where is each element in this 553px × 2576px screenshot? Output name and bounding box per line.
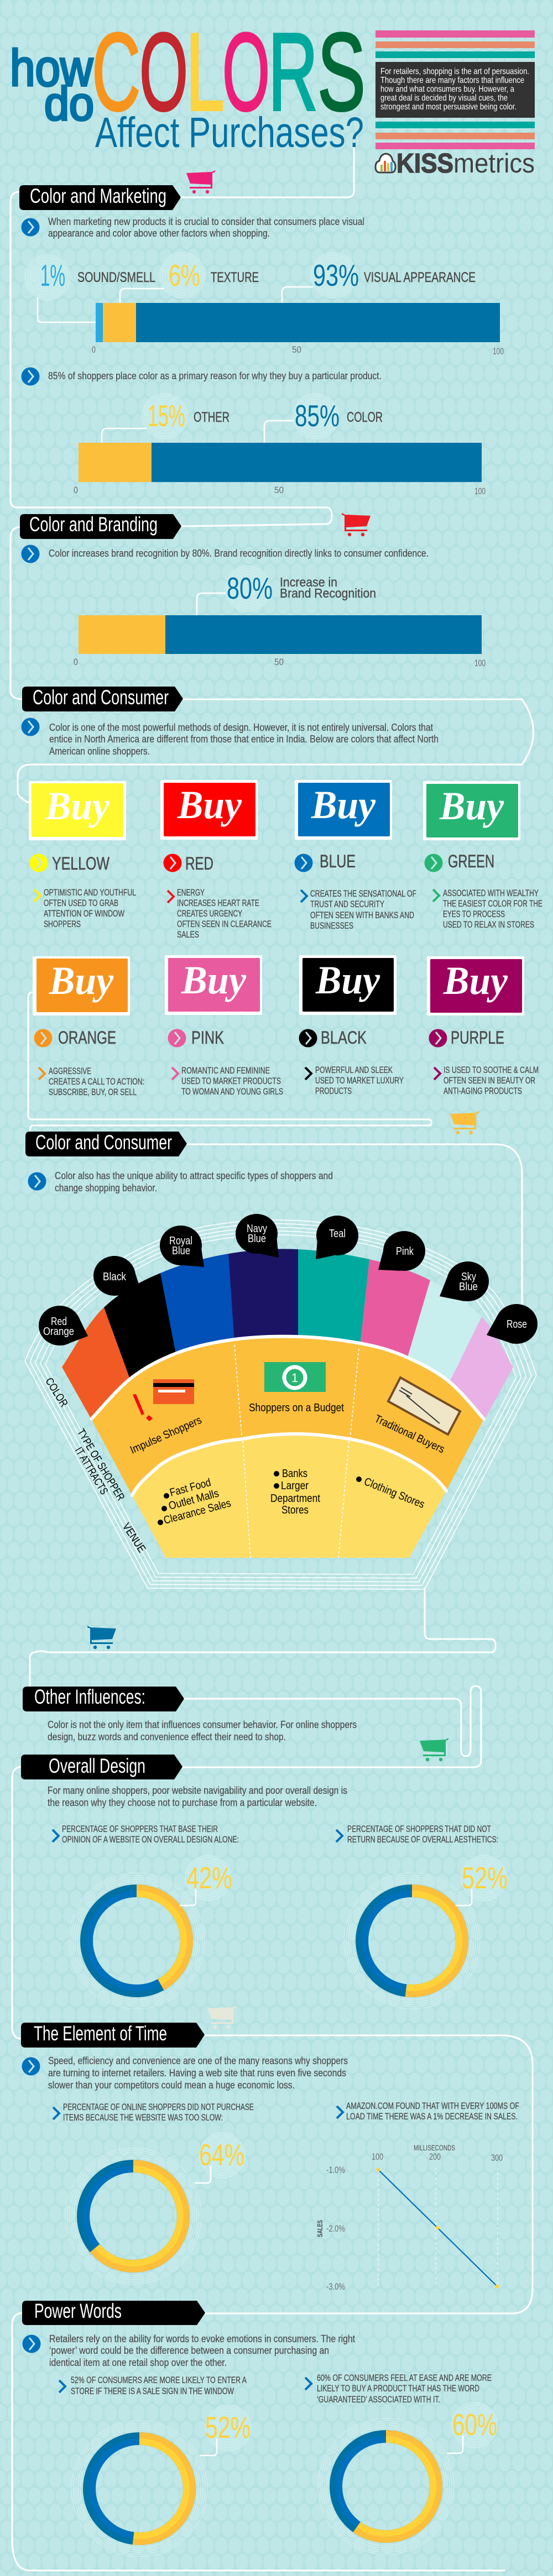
text block: power words bbox=[49, 2333, 355, 2368]
title: R bbox=[268, 11, 318, 134]
bullet icon bbox=[22, 2057, 40, 2075]
stat text: guaranteed: ‘GUARANTEED’ ASSOCIATED WITH IT. bbox=[317, 2394, 440, 2405]
panel: red: INCREASES HEART RATE bbox=[177, 898, 259, 908]
bar chart: factors: 0 bbox=[92, 344, 96, 355]
panel: purple bbox=[427, 956, 539, 1096]
stat text: did not return bbox=[336, 1824, 498, 1845]
callout: 93% visual appearance: VISUAL APPEARANCE bbox=[364, 270, 476, 285]
panel: blue: BLUE bbox=[320, 851, 356, 871]
icon: red cart bbox=[342, 513, 371, 536]
venue labels: Outlet Malls bbox=[168, 1488, 220, 1512]
panel: blue bbox=[294, 780, 416, 931]
panel: orange: ORANGE bbox=[58, 1028, 116, 1048]
connector line: overall design to time bbox=[12, 1767, 21, 2039]
venue labels bbox=[158, 1468, 426, 1527]
panel: black: BLACK bbox=[321, 1028, 367, 1048]
callout: 15% other: OTHER bbox=[194, 410, 229, 425]
title: C bbox=[92, 11, 140, 134]
text block: branding intro: Color increases brand recognition by 80%. Brand recognition directly links to consumer confidence. bbox=[49, 548, 429, 559]
text block: overall design: the reason why they choose not to purchase from a particular website. bbox=[48, 1797, 317, 1808]
bullet icon bbox=[22, 2335, 41, 2353]
venue labels: Fast Food bbox=[169, 1477, 212, 1499]
panel: pink: ROMANTIC AND FEMININE bbox=[181, 1065, 270, 1076]
heading: other influences: Other Influences: bbox=[34, 1685, 145, 1708]
bar chart: color vs other bbox=[74, 443, 486, 496]
panel: yellow: SHOPPERS bbox=[44, 919, 81, 929]
panel: black: POWERFUL AND SLEEK bbox=[315, 1065, 393, 1075]
text block: shopper types intro bbox=[55, 1170, 333, 1193]
bar chart: brand recognition: 100 bbox=[474, 658, 486, 668]
bar chart: brand recognition: 50 bbox=[274, 657, 284, 667]
panel: black bbox=[299, 955, 404, 1096]
donut chart: 42% bbox=[69, 1855, 232, 2009]
text block: consumer intro: Color is one of the most powerful methods of design. However, it is not entirely universal. Colors that bbox=[49, 722, 433, 733]
panel: blue: TRUST AND SECURITY bbox=[310, 899, 384, 909]
text block: consumer intro: entice in North America are different from those that entice in India. Below are colors that affect North bbox=[49, 734, 439, 745]
panel: green: EYES TO PROCESS bbox=[443, 909, 505, 919]
stat text: did not return: PERCENTAGE OF SHOPPERS THAT DID NOT bbox=[347, 1824, 491, 1834]
venue band bbox=[132, 1434, 446, 1558]
panel: orange: CREATES A CALL TO ACTION: bbox=[49, 1076, 144, 1087]
bar chart: factors: 50 bbox=[292, 344, 301, 355]
callout: 80% brand recognition bbox=[197, 566, 376, 615]
header stripes and intro panel: Though there are many factors that influence bbox=[380, 76, 524, 85]
panel: yellow: Buy bbox=[45, 784, 110, 828]
bar chart: brand recognition bbox=[74, 615, 486, 668]
text block: marketing intro: appearance and color above other factors when shopping. bbox=[48, 228, 270, 239]
panel: purple: ANTI-AGING PRODUCTS bbox=[444, 1086, 522, 1096]
line chart: load time vs sales: 200 bbox=[429, 2151, 441, 2162]
icon: orange cart bbox=[450, 1111, 479, 1134]
white arcs bbox=[91, 1337, 484, 1495]
panel: blue: OFTEN SEEN WITH BANKS AND bbox=[310, 910, 414, 920]
heading: power words bbox=[22, 2300, 205, 2325]
connector line: marketing to branding bbox=[11, 192, 332, 526]
donut chart: 60% guaranteed: 60% bbox=[452, 2407, 497, 2442]
icon: cheque bbox=[388, 1378, 460, 1434]
panel: orange: SUBSCRIBE, BUY, OR SELL bbox=[49, 1087, 137, 1097]
connector line: title to marketing bbox=[181, 143, 356, 197]
panel: orange: Buy bbox=[49, 959, 114, 1003]
line chart: load time vs sales: 100 bbox=[372, 2151, 383, 2162]
venue labels: Banks bbox=[282, 1468, 307, 1480]
title: Affect Purchases? bbox=[95, 109, 364, 156]
panel: red: SALES bbox=[177, 929, 199, 940]
heading: color and consumer two bbox=[25, 1131, 187, 1156]
callout: 1% sound/smell: 1% bbox=[40, 258, 65, 292]
panel: pink: PINK bbox=[191, 1028, 224, 1048]
icon: dollar bill bbox=[264, 1362, 326, 1392]
stat text: guaranteed: LIKELY TO BUY A PRODUCT THAT HAS THE WORD bbox=[317, 2383, 479, 2394]
donut chart: 64%: 64% bbox=[199, 2138, 244, 2172]
title: how bbox=[10, 39, 93, 97]
tag: royal blue: Blue bbox=[172, 1245, 190, 1257]
bullet icon bbox=[21, 367, 40, 386]
shopper labels: Impulse Shoppers bbox=[128, 1414, 204, 1457]
tag: royal blue bbox=[160, 1226, 204, 1267]
venue labels: Larger bbox=[281, 1480, 309, 1492]
axis labels: VENUE bbox=[120, 1521, 148, 1555]
connector line: consumer two to fan bbox=[187, 1144, 522, 1307]
bullet icon bbox=[28, 1172, 46, 1191]
panel: red: CREATES URGENCY bbox=[177, 908, 242, 919]
panel: pink: TO WOMAN AND YOUNG GIRLS bbox=[181, 1086, 283, 1097]
bar chart: color vs other: 100 bbox=[474, 486, 486, 496]
donut chart: 64% bbox=[65, 2133, 245, 2284]
callout: 6% texture bbox=[120, 253, 259, 303]
text block: element of time bbox=[48, 2055, 348, 2091]
bullet icon bbox=[21, 218, 40, 237]
axis labels bbox=[43, 1376, 148, 1555]
text block: shopper types intro: Color also has the unique ability to attract specific types of shoppers and bbox=[55, 1170, 333, 1181]
axis labels: TYPE OF SHOPPER bbox=[75, 1427, 127, 1503]
header stripes and intro panel: strongest and most persuasive being color. bbox=[380, 102, 517, 112]
text block: power words: Retailers rely on the ability for words to evoke emotions in consumers. The right bbox=[49, 2333, 355, 2344]
chart: colour fan bbox=[25, 1214, 538, 1589]
callout: 1% sound/smell: SOUND/SMELL bbox=[77, 270, 155, 285]
callout: 80% brand recognition: Brand Recognition bbox=[280, 586, 376, 600]
panel: black: USED TO MARKET LUXURY bbox=[315, 1075, 404, 1086]
panel: yellow bbox=[29, 781, 136, 929]
bullet icon bbox=[21, 545, 40, 563]
tag: red orange: Red bbox=[51, 1316, 67, 1328]
title: O bbox=[139, 11, 188, 134]
panel: orange bbox=[33, 956, 144, 1097]
stat text: opinion of website bbox=[53, 1824, 239, 1845]
tag: black: Black bbox=[103, 1271, 127, 1283]
tag: red orange: Orange bbox=[43, 1326, 74, 1338]
bar chart: color vs other: 50 bbox=[274, 485, 284, 495]
icon: pink cart bbox=[186, 170, 215, 193]
callout: 85% color: 85% bbox=[295, 399, 340, 433]
icon: credit card bbox=[133, 1379, 194, 1421]
stat text: sale sign bbox=[59, 2375, 247, 2396]
stat text: sale sign: STORE IF THERE IS A SALE SIGN IN THE WINDOW bbox=[71, 2386, 234, 2396]
text block: other influences: design, buzz words and convenience effect their need to shop. bbox=[48, 1731, 286, 1742]
heading: power words: Power Words bbox=[34, 2300, 122, 2322]
panel: blue: BUSINESSES bbox=[310, 920, 353, 931]
KISSmetrics logo: metrics bbox=[453, 149, 535, 179]
callout: 93% visual appearance bbox=[282, 253, 476, 303]
tag: black bbox=[93, 1256, 139, 1296]
line chart: load time vs sales: -1.0% bbox=[326, 2165, 345, 2175]
callout: 85% color: COLOR bbox=[347, 410, 383, 425]
panel: red: ENERGY bbox=[177, 887, 205, 898]
tag: pink: Pink bbox=[396, 1245, 414, 1258]
panel: blue: Buy bbox=[311, 783, 376, 827]
connector line: swatches to consumer two bbox=[28, 992, 431, 1132]
header stripes and intro panel: how and what consumers buy. However, a bbox=[380, 85, 514, 94]
header stripes and intro panel bbox=[375, 30, 535, 149]
tag: sky blue bbox=[440, 1261, 489, 1301]
panel: yellow: OPTIMISTIC AND YOUTHFUL bbox=[44, 887, 136, 898]
text block: shopper types intro: change shopping behavior. bbox=[55, 1182, 157, 1193]
stat text: guaranteed bbox=[305, 2373, 492, 2405]
tag: teal: Teal bbox=[329, 1228, 346, 1240]
stat text: too slow: PERCENTAGE OF ONLINE SHOPPERS DID NOT PURCHASE bbox=[63, 2102, 254, 2112]
text block: other influences: Color is not the only item that influences consumer behavior. For online shoppers bbox=[48, 1719, 357, 1730]
bar chart: brand recognition: 0 bbox=[74, 657, 78, 667]
callout: 1% sound/smell bbox=[25, 255, 155, 322]
panel: blue: CREATES THE SENSATIONAL OF bbox=[310, 888, 416, 899]
text block: element of time: slower than your competitors could mean a huge economic loss. bbox=[48, 2080, 295, 2091]
venue labels: Clearance Sales bbox=[163, 1497, 232, 1527]
title: do bbox=[44, 78, 94, 130]
stat text: opinion of website: PERCENTAGE OF SHOPPERS THAT BASE THEIR bbox=[62, 1824, 218, 1834]
text block: overall design: For many online shoppers, poor website navigability and poor overall design is bbox=[48, 1785, 347, 1796]
text block: element of time: are turning to internet retailers. Having a web site that runs even five seconds bbox=[48, 2067, 346, 2078]
icon: green cart bbox=[420, 1738, 448, 1761]
stat text: amazon bbox=[337, 2101, 519, 2122]
panel: pink: Buy bbox=[181, 958, 247, 1002]
icon: pale cart bbox=[207, 2006, 236, 2029]
line chart: load time vs sales: -2.0% bbox=[326, 2223, 345, 2234]
panel: green: Buy bbox=[439, 784, 504, 828]
tag: red orange bbox=[39, 1306, 88, 1345]
connector line: power words to end bbox=[12, 2313, 504, 2570]
callout: 15% other: 15% bbox=[148, 399, 185, 433]
callout: 15% other bbox=[102, 394, 229, 443]
donut chart: 52%: 52% bbox=[462, 1861, 508, 1895]
stat text: guaranteed: 60% OF CONSUMERS FEEL AT EASE AND ARE MORE bbox=[317, 2373, 492, 2383]
heading: element of time: The Element of Time bbox=[34, 2022, 167, 2045]
panel: purple: Buy bbox=[443, 959, 508, 1003]
tag: royal blue: Royal bbox=[169, 1235, 192, 1247]
icon: dollar bill: 1 bbox=[291, 1371, 298, 1385]
panel: green: GREEN bbox=[448, 851, 494, 871]
connector line: consumer to swatches bbox=[18, 699, 533, 803]
callout: 93% visual appearance: 93% bbox=[313, 258, 359, 292]
stat text: sale sign: 52% OF CONSUMERS ARE MORE LIKELY TO ENTER A bbox=[71, 2375, 247, 2385]
stat text: did not return: RETURN BECAUSE OF OVERALL AESTHETICS: bbox=[347, 1834, 498, 1845]
donut chart: 52% bbox=[344, 1855, 508, 2009]
bullet icon bbox=[21, 718, 40, 736]
text block: element of time: Speed, efficiency and convenience are one of the many reasons why shoppers bbox=[48, 2055, 348, 2066]
donut chart: 52% sale sign bbox=[71, 2405, 251, 2557]
line chart: load time vs sales: MILLISECONDS bbox=[414, 2143, 455, 2152]
text block: 85% of shoppers: 85% of shoppers place color as a primary reason for why they buy a particular product. bbox=[48, 370, 382, 381]
shopper band bbox=[91, 1337, 484, 1495]
panel: red bbox=[160, 780, 272, 940]
title: L bbox=[186, 11, 225, 134]
title: S bbox=[317, 11, 366, 134]
icon: blue cart bbox=[87, 1626, 116, 1649]
heading: color and consumer bbox=[22, 686, 183, 711]
panel: yellow: YELLOW bbox=[52, 854, 110, 873]
heading: color and branding: Color and Branding bbox=[29, 513, 158, 536]
tag: navy blue: Blue bbox=[248, 1233, 266, 1245]
tag: sky blue: Blue bbox=[459, 1281, 478, 1293]
KISSmetrics logo: KISS bbox=[397, 149, 453, 179]
panel: yellow: ATTENTION OF WINDOW bbox=[44, 908, 124, 919]
tag: navy blue: Navy bbox=[247, 1223, 267, 1235]
panel: orange: AGGRESSIVE bbox=[49, 1066, 91, 1076]
connector line: branding to consumer bbox=[11, 527, 22, 699]
panel: red: OFTEN SEEN IN CLEARANCE bbox=[177, 919, 272, 929]
donut chart: 42%: 42% bbox=[186, 1861, 232, 1895]
panel: pink bbox=[165, 955, 283, 1097]
panel: black: PRODUCTS bbox=[315, 1086, 352, 1096]
tag: sky blue: Sky bbox=[461, 1271, 476, 1283]
callout: 6% texture: 6% bbox=[169, 258, 200, 292]
stat text: too slow: ITEMS BECAUSE THE WEBSITE WAS TOO SLOW: bbox=[63, 2112, 223, 2123]
text block: marketing intro bbox=[48, 216, 364, 239]
tag: teal bbox=[316, 1216, 358, 1259]
tag: pink bbox=[378, 1231, 425, 1271]
connector line: time to power words bbox=[205, 2035, 533, 2313]
heading: color and consumer two: Color and Consumer bbox=[35, 1131, 172, 1154]
venue labels: Stores bbox=[281, 1504, 309, 1516]
text block: marketing intro: When marketing new products it is crucial to consider that consumers place visual bbox=[48, 216, 364, 227]
text block: consumer intro: American online shoppers. bbox=[49, 746, 150, 757]
title: O bbox=[222, 11, 270, 134]
shopper labels bbox=[128, 1402, 446, 1457]
axis labels: IT ATTRACTS bbox=[72, 1445, 110, 1497]
shopper labels: Traditional Buyers bbox=[373, 1413, 446, 1455]
KISSmetrics logo bbox=[375, 149, 535, 179]
concentric outlines bbox=[25, 1220, 536, 1589]
panel: red: RED bbox=[185, 854, 213, 873]
donut chart: 60% guaranteed bbox=[318, 2402, 497, 2554]
callout: 80% brand recognition: Increase in bbox=[280, 575, 337, 589]
connector line: other influences to overall design bbox=[182, 1686, 481, 1767]
panel: yellow: OFTEN USED TO GRAB bbox=[44, 898, 118, 908]
stat text: too slow bbox=[53, 2102, 254, 2123]
donut chart: 52% sale sign: 52% bbox=[205, 2410, 251, 2444]
panel: black: Buy bbox=[315, 958, 380, 1002]
line chart: load time vs sales: SALES bbox=[316, 2220, 324, 2237]
callout: 6% texture: TEXTURE bbox=[211, 270, 259, 285]
tag: rose bbox=[487, 1304, 538, 1344]
bar chart: factors: 100 bbox=[493, 346, 504, 357]
text block: power words: ‘power’ word could be the difference between a consumer purchasing an bbox=[49, 2345, 329, 2356]
text block: power words: identical item at one retail shop over the other. bbox=[49, 2357, 227, 2368]
venue labels: Clothing Stores bbox=[362, 1475, 426, 1511]
callout: 80% brand recognition: 80% bbox=[227, 571, 273, 605]
tag: rose: Rose bbox=[507, 1318, 527, 1331]
text block: consumer intro bbox=[49, 722, 439, 757]
title bbox=[10, 11, 366, 156]
text block: other influences bbox=[48, 1719, 357, 1742]
bar chart: color vs other: 0 bbox=[74, 485, 78, 495]
connector line: fan to other influences bbox=[30, 1588, 495, 1687]
tag: navy blue bbox=[236, 1214, 279, 1258]
text block: overall design bbox=[48, 1785, 347, 1808]
panel: red: Buy bbox=[177, 783, 242, 827]
venue labels: Department bbox=[270, 1493, 320, 1505]
heading: overall design: Overall Design bbox=[49, 1755, 145, 1777]
callout: 85% color bbox=[264, 394, 383, 443]
line chart: load time vs sales: -3.0% bbox=[326, 2281, 345, 2292]
axis labels: COLOR bbox=[43, 1376, 70, 1409]
heading: color and consumer: Color and Consumer bbox=[33, 686, 169, 709]
stat text: opinion of website: OPINION OF A WEBSITE ON OVERALL DESIGN ALONE: bbox=[62, 1834, 239, 1845]
panel: pink: USED TO MARKET PRODUCTS bbox=[181, 1076, 281, 1086]
heading: color and marketing: Color and Marketing bbox=[30, 185, 166, 207]
header stripes and intro panel: great deal is decided by visual cues, the bbox=[380, 93, 508, 103]
colour segments bbox=[62, 1307, 133, 1419]
panel: purple: PURPLE bbox=[451, 1028, 504, 1048]
line chart: load time vs sales bbox=[316, 2143, 503, 2292]
shopper labels: Shoppers on a Budget bbox=[249, 1402, 344, 1414]
bar chart: factors bbox=[92, 303, 504, 357]
panel: green bbox=[423, 781, 542, 930]
line chart: load time vs sales: 300 bbox=[491, 2153, 503, 2163]
